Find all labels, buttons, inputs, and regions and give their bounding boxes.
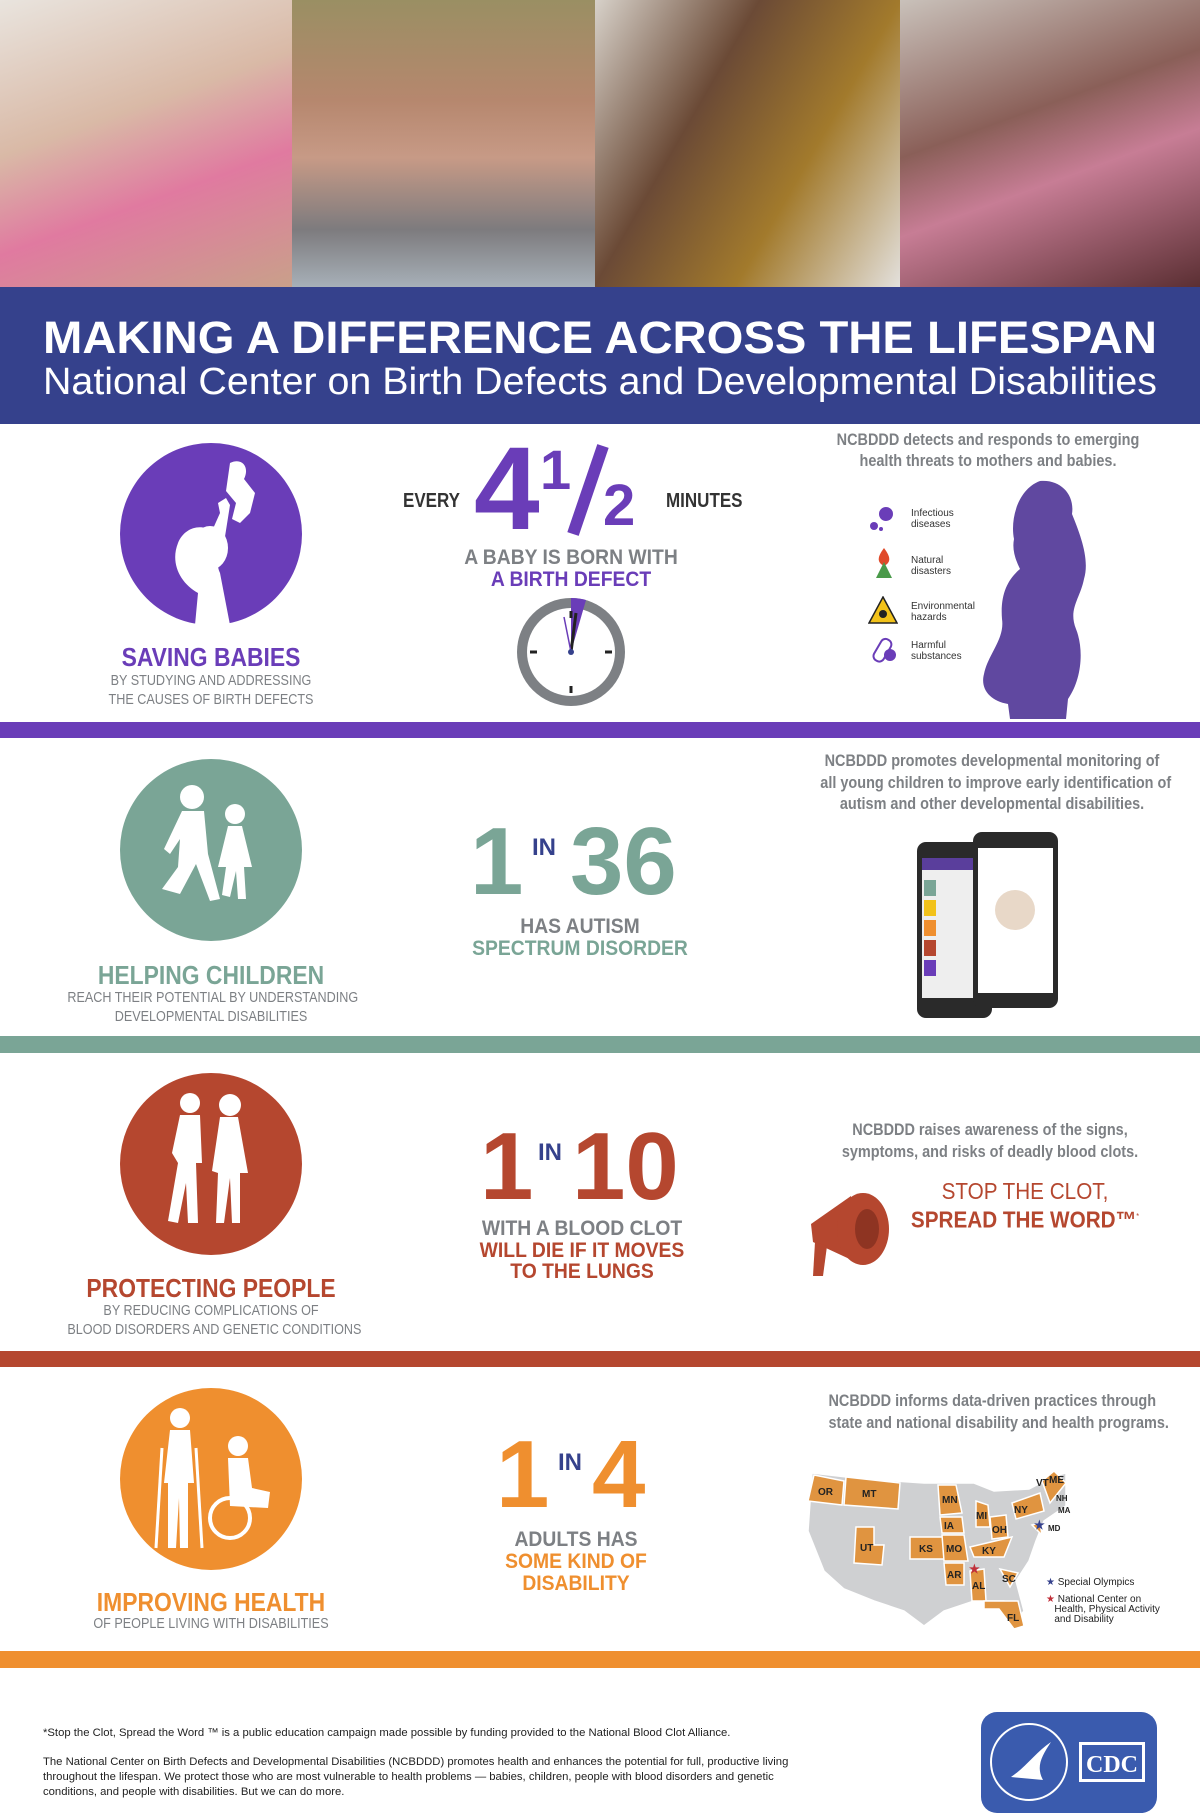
list: threats: Environmental — [911, 601, 975, 612]
list: threats: substances — [911, 651, 962, 662]
section: helping children — [67, 751, 1172, 1025]
section: saving babies — [108, 423, 1139, 719]
photo: three children — [292, 0, 595, 287]
photo strip — [0, 0, 1200, 287]
subtitle: National Center on Birth Defects and Developmental Disabilities — [43, 361, 1157, 403]
heading: protecting people: PROTECTING PEOPLE — [86, 1273, 336, 1303]
icon: children running — [120, 759, 302, 941]
text: protecting people sub: BLOOD DISORDERS AND GENETIC CONDITIONS — [67, 1321, 361, 1338]
icon: harmful substances — [872, 638, 896, 663]
text: a baby is born with a birth defect: A BABY IS BORN WITH — [464, 546, 678, 569]
title: MAKING A DIFFERENCE ACROSS THE LIFESPAN — [43, 312, 1157, 363]
text: helping children sub — [67, 989, 358, 1025]
logo: HHS and CDC: CDC — [1086, 1752, 1138, 1778]
text: blood clot awareness — [842, 1120, 1138, 1161]
legend: map: Health, Physical Activity — [1054, 1604, 1160, 1615]
icon: environmental hazards — [868, 596, 898, 624]
text: data-driven practices: NCBDDD informs data-driven practices through — [828, 1391, 1156, 1410]
footer text: The National Center on Birth Defects and Developmental Disabilities (NCBDDD) promotes health and enhances the potential for full, productive living throughout the lifespan. We protect those who are most vulnerable to health problems — babies, children, people with blood disorders and genetic conditions, and people with disabilities. But we can do more. — [43, 1756, 788, 1798]
text: has autism: SPECTRUM DISORDER — [472, 937, 688, 960]
map: US states: ★ — [1034, 1518, 1045, 1532]
text: blood clot awareness: symptoms, and risks of deadly blood clots. — [842, 1142, 1138, 1161]
map: US states: MN — [942, 1495, 958, 1506]
divider: orange — [0, 1651, 1200, 1668]
stat: every 4 1/2 minutes: EVERY — [403, 490, 460, 512]
stat: 1 in 4: 4 — [592, 1421, 645, 1528]
text: ncbddd detects threats: health threats to mothers and babies. — [860, 451, 1116, 470]
map: US states — [808, 1472, 1071, 1628]
text: data-driven practices: state and national disability and health programs. — [828, 1413, 1169, 1432]
stat: every 4 1/2 minutes: MINUTES — [666, 490, 742, 512]
text: helping children sub: DEVELOPMENTAL DISABILITIES — [115, 1008, 307, 1025]
text: developmental monitoring: NCBDDD promotes developmental monitoring of — [825, 751, 1159, 770]
legend: map: ★ National Center on — [1046, 1594, 1141, 1605]
text: stop the clot — [911, 1178, 1139, 1233]
list: threats — [868, 507, 975, 663]
text: data-driven practices — [828, 1391, 1169, 1432]
icon: natural disasters — [876, 548, 892, 578]
icon: pregnant woman silhouette — [983, 480, 1086, 719]
text: adults has disability — [505, 1528, 647, 1595]
text: has autism — [472, 915, 688, 960]
map: US states: OR — [818, 1487, 834, 1498]
map: US states: OH — [992, 1525, 1007, 1536]
footer text: *Stop the Clot, Spread the Word ™ is a public education campaign made possible by funding provided to the National Blood Clot Alliance. — [43, 1727, 730, 1739]
text: improving health sub: OF PEOPLE LIVING WITH DISABILITIES — [93, 1615, 329, 1632]
heading: helping children: HELPING CHILDREN — [98, 960, 324, 990]
map: US states: NY — [1014, 1505, 1028, 1516]
list: threats: Natural — [911, 555, 943, 566]
legend: map — [1046, 1577, 1160, 1625]
text: with a blood clot: WITH A BLOOD CLOT — [482, 1217, 682, 1240]
text: developmental monitoring: autism and other developmental disabilities. — [840, 794, 1144, 813]
heading: saving babies: SAVING BABIES — [122, 642, 300, 672]
list: threats: hazards — [911, 612, 947, 623]
text: has autism: HAS AUTISM — [520, 915, 640, 938]
stat: 1 in 36: 36 — [570, 808, 677, 915]
icon: person with crutches and wheelchair — [120, 1388, 302, 1570]
map: US states: ME — [1049, 1475, 1064, 1486]
map: US states: KS — [919, 1544, 933, 1555]
map: US states: NH — [1056, 1494, 1068, 1503]
map: US states: MO — [946, 1544, 962, 1555]
text: stop the clot: STOP THE CLOT, — [942, 1178, 1108, 1204]
map: US states: ★ — [969, 1562, 980, 1576]
map: US states: FL — [1007, 1613, 1019, 1624]
text: blood clot awareness: NCBDDD raises awareness of the signs, — [852, 1120, 1128, 1139]
legend: map: and Disability — [1054, 1614, 1114, 1625]
text: adults has disability: ADULTS HAS — [514, 1528, 638, 1551]
heading: improving health: IMPROVING HEALTH — [97, 1587, 325, 1617]
text: with a blood clot — [480, 1217, 684, 1283]
map: US states: AR — [947, 1570, 962, 1581]
icon: phones with milestone tracker — [917, 832, 1058, 1018]
text: helping children sub: REACH THEIR POTENTIAL BY UNDERSTANDING — [67, 989, 358, 1006]
stat: 1 in 10: 10 — [572, 1113, 679, 1220]
text: stop the clot: SPREAD THE WORD™* — [911, 1207, 1139, 1233]
text: developmental monitoring — [820, 751, 1172, 813]
stat: 1 in 4 — [496, 1421, 645, 1528]
photo: older couple — [900, 0, 1200, 287]
map: US states: MA — [1058, 1506, 1071, 1515]
section: protecting people — [67, 1073, 1139, 1338]
text: protecting people sub — [67, 1302, 361, 1338]
text: with a blood clot: WILL DIE IF IT MOVES — [480, 1238, 684, 1262]
text: a baby is born with a birth defect — [464, 546, 678, 591]
photo: young woman signing — [595, 0, 900, 287]
text: ncbddd detects threats — [837, 430, 1139, 470]
text: adults has disability: SOME KIND OF — [505, 1550, 647, 1573]
map: US states: MI — [976, 1511, 987, 1522]
divider: teal — [0, 1036, 1200, 1053]
map: US states: KY — [982, 1546, 996, 1557]
text: developmental monitoring: all young children to improve early identification of — [820, 772, 1171, 792]
stat: 1 in 36 — [470, 808, 677, 915]
map: US states: VT — [1036, 1478, 1049, 1489]
stat: 1 in 10: IN — [538, 1139, 562, 1166]
footer text — [43, 1727, 788, 1798]
section: improving health — [93, 1388, 1169, 1632]
divider: red — [0, 1351, 1200, 1367]
stat: 1 in 36: IN — [532, 834, 556, 861]
text: adults has disability: DISABILITY — [522, 1572, 630, 1595]
map: US states: MT — [862, 1489, 876, 1500]
text: saving babies sub: BY STUDYING AND ADDRESSING — [111, 672, 311, 689]
stat: every 4 1/2 minutes: 1 — [540, 438, 571, 501]
icon: parent lifting baby — [120, 443, 302, 624]
text: protecting people sub: BY REDUCING COMPLICATIONS OF — [103, 1302, 319, 1319]
stat: every 4 1/2 minutes: 4 — [474, 423, 540, 555]
text: with a blood clot: TO THE LUNGS — [510, 1260, 654, 1283]
text: ncbddd detects threats: NCBDDD detects and responds to emerging — [837, 430, 1139, 449]
list: threats: diseases — [911, 519, 950, 530]
legend: map: ★ Special Olympics — [1046, 1577, 1134, 1588]
text: saving babies sub — [108, 672, 313, 708]
map: US states: UT — [860, 1543, 873, 1554]
icon: two people walking — [120, 1073, 302, 1255]
list: threats: Infectious — [911, 508, 954, 519]
stat: every 4 1/2 minutes — [403, 423, 742, 555]
stat: 1 in 4: 1 — [496, 1421, 549, 1528]
map: US states: IA — [944, 1521, 954, 1532]
icon: infectious diseases — [870, 507, 893, 531]
icon: clock — [517, 598, 625, 706]
divider: purple — [0, 722, 1200, 738]
map: US states: SC — [1002, 1574, 1016, 1585]
stat: 1 in 10: 1 — [480, 1113, 533, 1220]
stat: 1 in 36: 1 — [470, 808, 523, 915]
header banner — [0, 287, 1200, 424]
stat: 1 in 10 — [480, 1113, 679, 1220]
map: US states: AL — [972, 1581, 985, 1592]
map: US states: MD — [1048, 1524, 1061, 1533]
icon: megaphone — [811, 1193, 889, 1276]
logo: HHS and CDC — [981, 1712, 1157, 1813]
text: saving babies sub: THE CAUSES OF BIRTH DEFECTS — [109, 691, 313, 708]
stat: every 4 1/2 minutes: 2 — [603, 473, 635, 538]
text: a baby is born with a birth defect: A BIRTH DEFECT — [491, 568, 651, 591]
list: threats: disasters — [911, 566, 951, 577]
photo: mother and baby — [0, 0, 292, 287]
stat: 1 in 4: IN — [558, 1449, 582, 1476]
list: threats: Harmful — [911, 640, 946, 651]
